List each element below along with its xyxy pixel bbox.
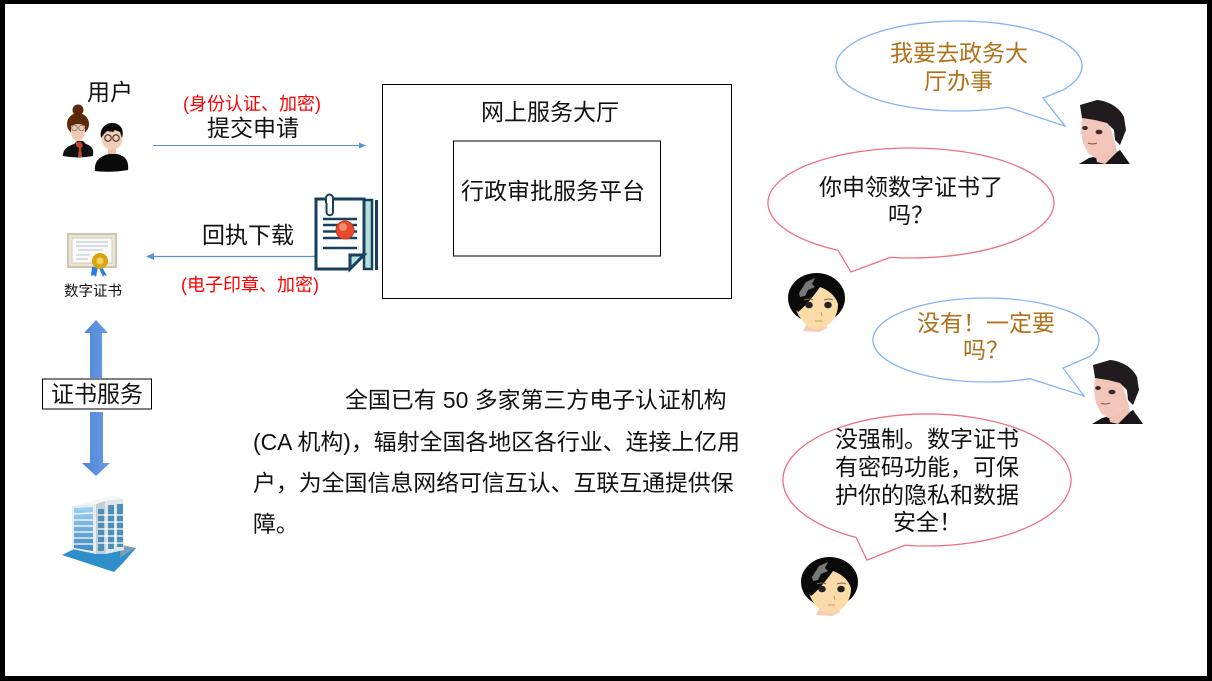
speech bubble: going to the service hall: 我要去政务大 bbox=[890, 40, 1028, 66]
heading: online service hall: 网上服务大厅 bbox=[481, 99, 619, 125]
label: submit application: 提交申请 bbox=[207, 115, 299, 141]
icon: office building bbox=[62, 496, 136, 572]
arrow: receipt bbox=[146, 253, 316, 260]
label: receipt download: 回执下载 bbox=[202, 222, 294, 248]
speech bubble: do you have a certificate: 你申领数字证书了 bbox=[819, 174, 1003, 200]
speech bubble: do you have a certificate bbox=[768, 148, 1054, 272]
icon: woman face upper bbox=[788, 273, 845, 332]
icon: certificate bbox=[68, 234, 116, 277]
speech bubble: is it required: 没有！一定要 bbox=[917, 310, 1055, 336]
label: certificate service: 证书服务 bbox=[51, 381, 143, 407]
icon: man face lower bbox=[1092, 360, 1143, 424]
label: digital certificate: 数字证书 bbox=[64, 283, 122, 300]
label: identity and encryption: (身份认证、加密) bbox=[183, 94, 321, 114]
arrow: submit bbox=[153, 142, 366, 148]
speech bubble: do you have a certificate: 吗？ bbox=[888, 202, 934, 228]
speech bubble: not mandatory: 没强制。数字证书 bbox=[835, 426, 1019, 452]
speech bubble: not mandatory bbox=[783, 414, 1071, 560]
arrow: up bbox=[84, 320, 108, 378]
speech bubble: not mandatory: 有密码功能，可保 bbox=[835, 454, 1019, 480]
speech bubble: going to the service hall bbox=[836, 21, 1082, 126]
panel: administrative approval platform bbox=[454, 141, 660, 256]
speech bubble: not mandatory: 安全！ bbox=[893, 509, 962, 535]
speech bubble: not mandatory: 护你的隐私和数据 bbox=[835, 482, 1019, 508]
panel: online service hall bbox=[382, 84, 732, 298]
speech bubble: is it required: 吗？ bbox=[963, 337, 1009, 363]
icon: woman face lower bbox=[801, 557, 858, 616]
text block: CA institutions: 障。 bbox=[253, 511, 299, 537]
icon: document bbox=[316, 194, 376, 270]
label: electronic seal and encryption: (电子印章、加密) bbox=[181, 275, 319, 295]
speech bubble: going to the service hall: 厅办事 bbox=[924, 68, 993, 94]
text block: CA institutions: 全国已有 50 多家第三方电子认证机构 bbox=[345, 387, 727, 413]
arrow: down bbox=[82, 412, 110, 476]
text block: CA institutions bbox=[253, 387, 740, 537]
text block: CA institutions: (CA 机构)，辐射全国各地区各行业、连接上亿用 bbox=[253, 429, 740, 455]
icon: man face top bbox=[1079, 100, 1130, 164]
panel: administrative approval platform: 行政审批服务平台 bbox=[461, 178, 645, 204]
speech bubble: is it required bbox=[873, 298, 1099, 396]
label: user: 用户 bbox=[87, 79, 133, 105]
text block: CA institutions: 户，为全国信息网络可信互认、互联互通提供保 bbox=[253, 470, 734, 496]
icon: users bbox=[63, 104, 128, 172]
